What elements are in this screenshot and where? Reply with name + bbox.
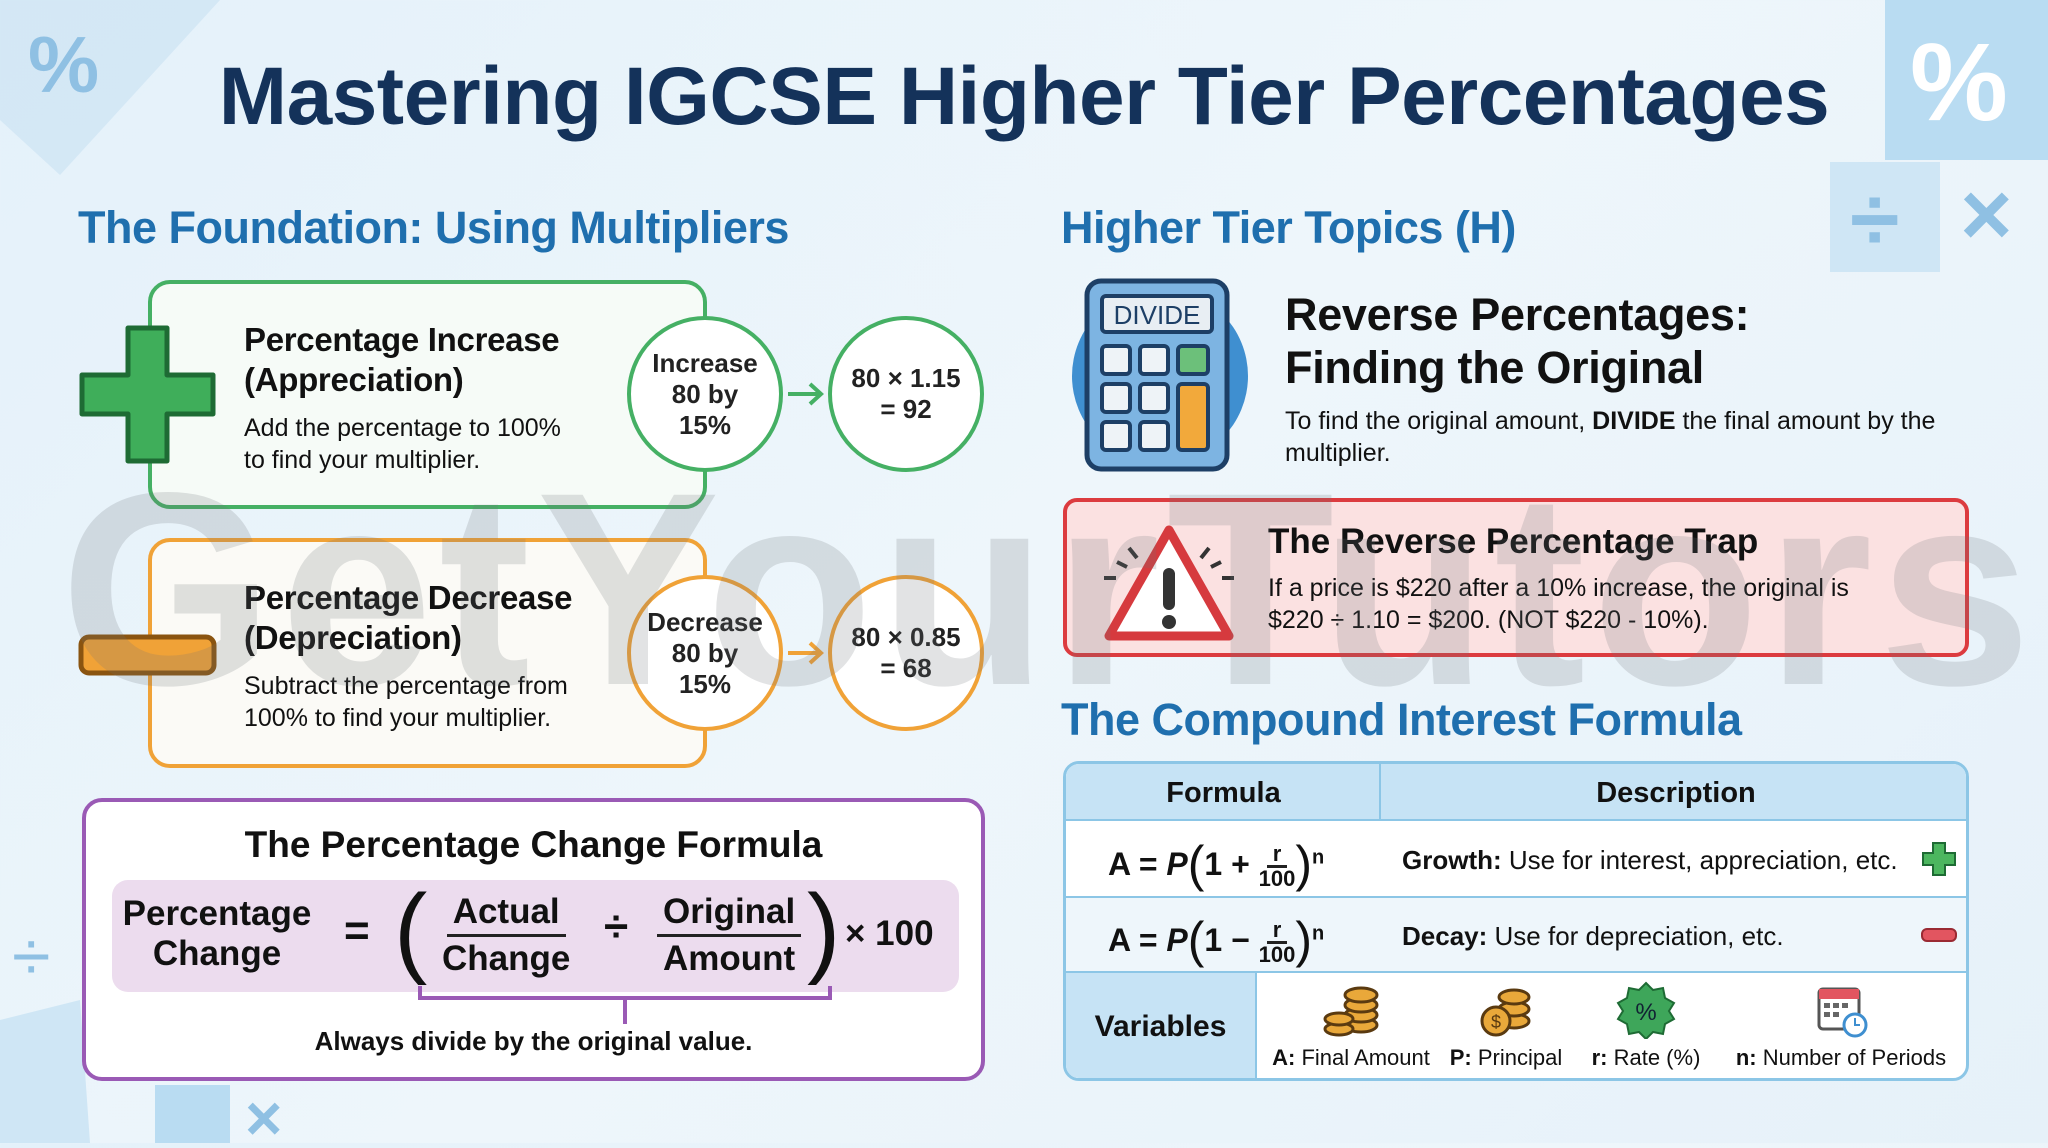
heading: foundation: The Foundation: Using Multipliers — [78, 202, 789, 253]
decrease title: Percentage Decrease — [244, 579, 572, 616]
row: growth — [1066, 821, 1972, 898]
circle: 80 × 0.85 = 68: 80 × 0.85 — [851, 622, 961, 652]
formula band: Percentage — [123, 894, 311, 933]
formula band: ( — [394, 874, 427, 986]
panel: percentage increase — [148, 280, 707, 509]
formula band: Change — [442, 939, 570, 978]
circle: increase 80 by 15%: 80 by — [672, 378, 738, 408]
circle: 80 × 1.15 = 92 — [828, 316, 984, 472]
icon: calculator — [1072, 278, 1248, 472]
arrow — [788, 642, 824, 664]
arrow — [788, 382, 824, 406]
variable: A — [1272, 986, 1430, 1070]
header row: Formula — [1166, 777, 1281, 809]
header row: Description — [1596, 777, 1756, 809]
row: decay: r — [1273, 917, 1281, 942]
variable: A: A: Final Amount — [1272, 1045, 1430, 1070]
callout: reverse percentage trap — [1063, 498, 1969, 657]
icon: calculator: DIVIDE — [1114, 300, 1200, 330]
panel: percentage decrease — [148, 538, 707, 768]
circle: 80 × 1.15 = 92: = 92 — [880, 394, 932, 424]
increase text: Add the percentage to 100% — [244, 414, 561, 442]
formula band: × 100 — [845, 914, 934, 953]
row: growth: A = P(1 + )n — [1108, 836, 1324, 892]
row: decay: 100 — [1259, 942, 1295, 967]
formula band — [112, 880, 959, 992]
decoration: bottom-left shapes: ÷ — [12, 917, 50, 995]
decrease text: Subtract the percentage from — [244, 672, 568, 700]
variable: n: n: Number of Periods — [1736, 1045, 1946, 1070]
table: compound interest — [1063, 761, 1969, 1081]
variable: P: P: Principal — [1450, 1045, 1562, 1070]
formula title: The Percentage Change Formula — [245, 824, 822, 865]
trap text: $220 ÷ 1.10 = $200. (NOT $220 - 10%). — [1268, 606, 1709, 634]
row: decay: A = P(1 − )n — [1108, 912, 1324, 968]
row: growth: Growth: Use for interest, appreciation, etc. — [1402, 845, 1898, 875]
variable: n — [1736, 988, 1946, 1070]
circle: 80 × 0.85 = 68 — [828, 575, 984, 731]
heading: compound interest: The Compound Interest Formula — [1061, 694, 1742, 745]
circle: 80 × 1.15 = 92: 80 × 1.15 — [851, 363, 961, 393]
decoration: top-left triangle with percent: % — [28, 20, 99, 109]
panel: percentage change formula — [82, 798, 985, 1081]
bracket — [418, 986, 832, 1024]
trap text — [1268, 574, 1849, 634]
decoration: top-right squares with symbols: ÷ — [1850, 170, 1899, 270]
circle: decrease 80 by 15% — [627, 575, 783, 731]
increase title — [244, 321, 559, 398]
circle: increase 80 by 15%: 15% — [679, 410, 731, 440]
formula band: Change — [153, 934, 281, 973]
circle: 80 × 0.85 = 68: = 68 — [880, 653, 932, 683]
increase text: to find your multiplier. — [244, 446, 480, 474]
circle: increase 80 by 15%: Increase — [652, 348, 758, 378]
decrease title: (Depreciation) — [244, 619, 462, 656]
reverse percentages title: Finding the Original — [1285, 342, 1704, 393]
increase title: (Appreciation) — [244, 361, 463, 398]
variable: P — [1450, 988, 1562, 1070]
heading: higher tier topics: Higher Tier Topics (H) — [1061, 202, 1516, 253]
formula band: = — [344, 906, 370, 955]
header row — [1066, 764, 1972, 821]
formula band: ) — [807, 874, 840, 986]
watermark: GetYourTutors — [60, 436, 2038, 743]
reverse percentages text: To find the original amount, DIVIDE the final amount by the multiplier. — [1285, 407, 1935, 467]
decoration: top-left triangle with percent — [0, 0, 220, 175]
reverse percentages title — [1285, 289, 1749, 393]
row: decay: Decay: Use for depreciation, etc. — [1402, 921, 1784, 951]
variable: r: r: Rate (%) — [1592, 1045, 1700, 1070]
trap title: The Reverse Percentage Trap — [1268, 522, 1758, 561]
decoration: bottom-left shapes — [0, 917, 282, 1143]
circle: increase 80 by 15% — [627, 316, 783, 472]
row: growth: 100 — [1259, 866, 1295, 891]
variable: r — [1592, 982, 1700, 1070]
decoration: top-right squares with symbols: × — [1960, 165, 2013, 265]
formula band: Amount — [663, 939, 795, 978]
formula band: Original — [663, 892, 795, 931]
row: growth: r — [1273, 841, 1281, 866]
variable: r: % — [1635, 999, 1657, 1026]
reverse percentages title: Reverse Percentages: — [1285, 289, 1749, 340]
decoration: top-right squares with symbols: % — [1910, 21, 2008, 144]
decrease title — [244, 579, 572, 656]
decoration: top-right squares with symbols — [1830, 0, 2048, 272]
increase title: Percentage Increase — [244, 321, 559, 358]
row: variables — [1066, 973, 1946, 1078]
formula band: ÷ — [604, 902, 628, 951]
note: Always divide by the original value. — [315, 1026, 752, 1056]
icon: minus — [78, 634, 216, 676]
increase text — [244, 414, 561, 474]
circle: decrease 80 by 15%: 80 by — [672, 638, 738, 668]
circle: decrease 80 by 15%: Decrease — [647, 606, 763, 636]
variable: P: $ — [1491, 1012, 1501, 1032]
trap text: If a price is $220 after a 10% increase, the original is — [1268, 574, 1849, 602]
row: variables: Variables — [1095, 1010, 1226, 1043]
circle: decrease 80 by 15%: 15% — [679, 668, 731, 698]
title: Mastering IGCSE Higher Tier Percentages — [219, 51, 1829, 142]
icon: plus — [80, 326, 216, 464]
decrease text: 100% to find your multiplier. — [244, 704, 551, 732]
formula band: Actual — [453, 892, 560, 931]
icon: warning — [1104, 526, 1234, 640]
decrease text — [244, 672, 568, 732]
row: decay — [1066, 898, 1972, 973]
